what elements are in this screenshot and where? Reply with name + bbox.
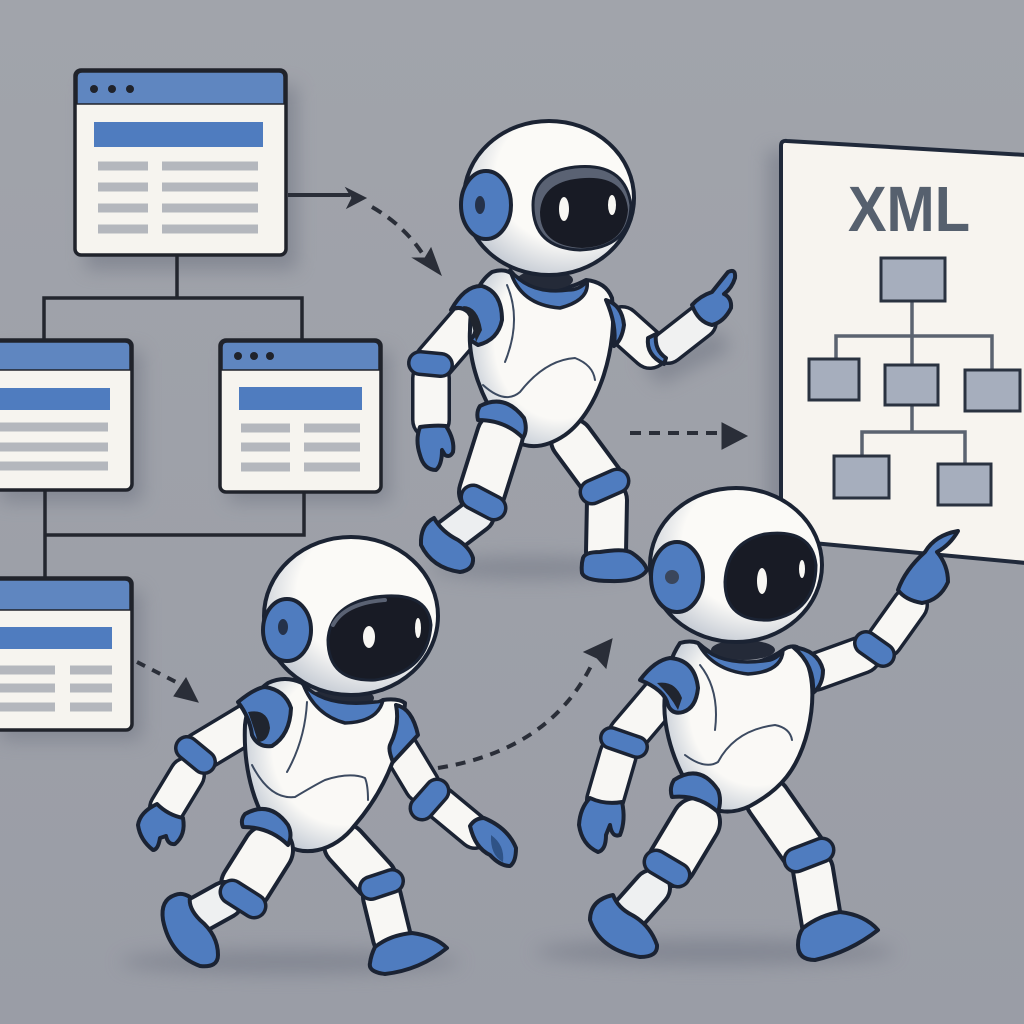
right arm bbox=[815, 531, 958, 672]
arrow: window to top robot bbox=[288, 188, 441, 275]
ear bbox=[263, 599, 311, 661]
window: bottom left page bbox=[0, 578, 132, 730]
XML heading: XML bbox=[848, 173, 970, 245]
soft shadows bbox=[0, 85, 895, 974]
right leg bbox=[345, 845, 447, 974]
robot: bottom left bbox=[138, 537, 516, 974]
robot: right bbox=[579, 488, 958, 960]
collar bbox=[510, 270, 587, 308]
visor bbox=[533, 166, 631, 250]
shoulder socket bbox=[248, 711, 270, 742]
left arm bbox=[418, 318, 472, 470]
robot: top bbox=[418, 121, 735, 581]
collar bbox=[698, 643, 783, 674]
visor bbox=[328, 596, 431, 680]
right arm bbox=[398, 745, 516, 866]
XML tree diagram bbox=[809, 258, 1020, 505]
shoulder socket bbox=[463, 306, 482, 342]
neck bbox=[310, 688, 374, 708]
arrow: bottom robot to right robot bbox=[438, 639, 612, 768]
neck bbox=[517, 270, 573, 290]
XML board bbox=[781, 141, 1024, 563]
torso bbox=[664, 642, 812, 811]
right arm bbox=[622, 271, 735, 364]
shoulders bbox=[640, 647, 823, 713]
shoulders bbox=[238, 687, 418, 762]
left leg bbox=[590, 773, 720, 957]
torso bbox=[470, 270, 613, 446]
left leg bbox=[162, 809, 290, 966]
collar bbox=[303, 684, 383, 723]
torso seams bbox=[685, 665, 792, 765]
window: middle left page bbox=[0, 340, 132, 490]
ear bbox=[461, 171, 511, 239]
right leg bbox=[572, 440, 647, 581]
torso seams bbox=[252, 702, 368, 800]
left leg bbox=[421, 402, 526, 572]
head bbox=[464, 121, 634, 275]
shoulders bbox=[451, 286, 624, 346]
connector lines between windows bbox=[44, 255, 304, 578]
window: middle right page bbox=[220, 340, 381, 492]
window: top page bbox=[75, 70, 286, 255]
head bbox=[650, 488, 822, 642]
shoulder socket bbox=[657, 683, 682, 710]
head bbox=[264, 537, 438, 695]
arrow: top robot to board bbox=[630, 423, 747, 449]
right leg bbox=[768, 800, 878, 960]
ear bbox=[651, 542, 703, 612]
visor bbox=[725, 533, 816, 620]
left arm bbox=[138, 722, 250, 850]
neck bbox=[711, 640, 775, 660]
arrow: bottom window to robot bbox=[137, 662, 198, 702]
torso bbox=[245, 679, 405, 851]
left arm bbox=[579, 695, 662, 852]
torso seams bbox=[483, 285, 595, 397]
